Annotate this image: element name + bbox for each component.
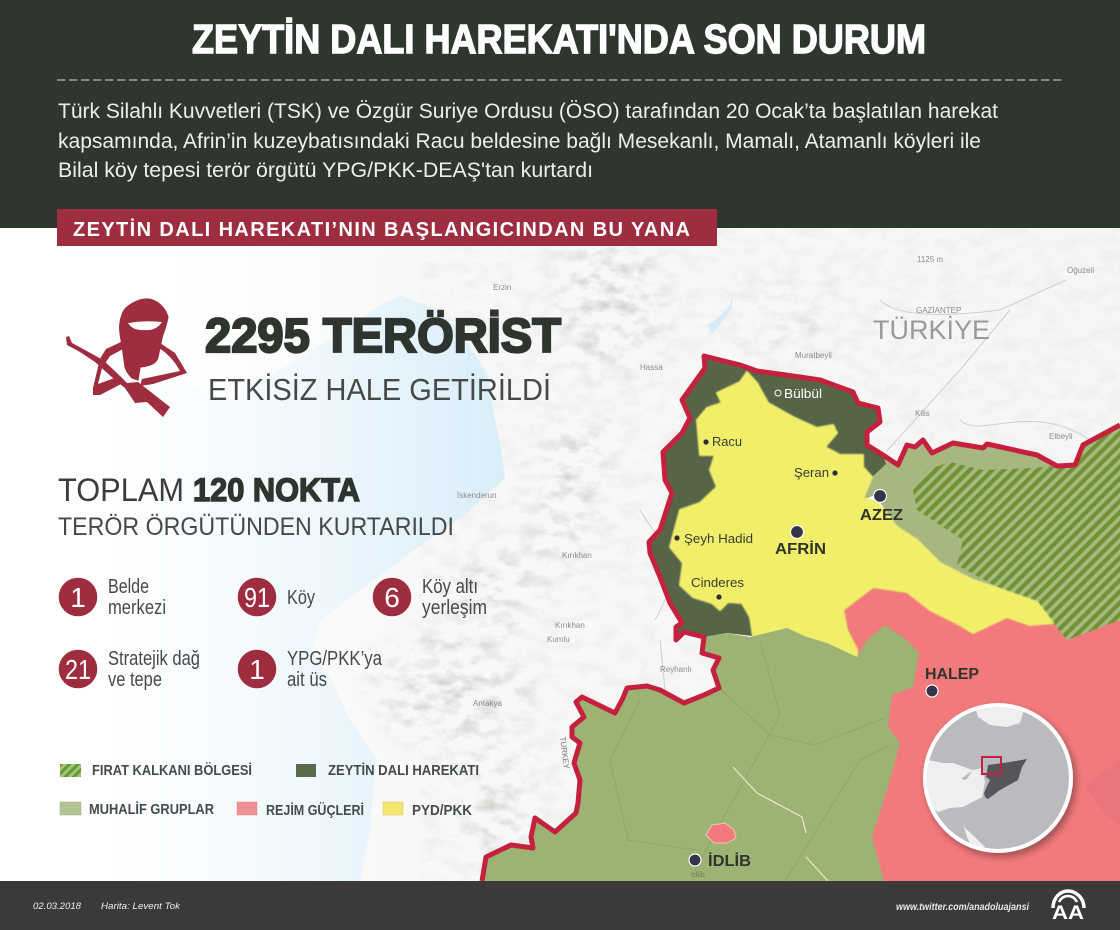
legend: PYD/PKK: PYD/PKK	[412, 803, 472, 819]
map place labels: Elbeyli	[1049, 432, 1073, 441]
intro paragraph: kapsamında, Afrin’in kuzeybatısındaki Racu beldesine bağlı Mesekanlı, Mamalı, Atamanlı köyleri ile	[58, 130, 981, 153]
city: İdlib: Idlib	[691, 870, 705, 879]
stat: 6 hamlets: yerleşim	[422, 597, 487, 619]
stats	[59, 576, 487, 691]
header band	[0, 0, 1120, 228]
mediterranean	[927, 760, 985, 812]
legend: regime	[237, 802, 364, 819]
legend: Olive Branch: ZEYTİN DALI HAREKATI	[328, 762, 479, 779]
city: Afrin	[775, 526, 826, 558]
stat: 6 hamlets	[373, 576, 487, 619]
map place labels: İskenderun	[457, 491, 497, 500]
stat: 6 hamlets: Köy altı	[422, 576, 478, 598]
stat: 1 base: YPG/PKK’ya	[287, 648, 383, 670]
region: darker area	[1085, 760, 1120, 825]
map place labels: Kumlu	[547, 635, 570, 644]
city: Cinderes: Cinderes	[691, 575, 745, 590]
stat: 21 hills	[59, 648, 200, 691]
banner: ZEYTİN DALI HAREKATI’NIN BAŞLANGICINDAN BU YANA	[73, 218, 690, 241]
title: ZEYTİN DALI HAREKATI'NDA SON DURUM	[192, 16, 926, 62]
logo: AA	[1052, 891, 1084, 924]
city: Bülbül: Bülbül	[784, 386, 822, 401]
city: Azez	[860, 490, 903, 524]
logo: AA: AA	[1052, 903, 1084, 924]
city: Şeyh Hadid: Şeyh Hadid	[684, 531, 753, 546]
region: opposition Idlib	[482, 625, 919, 881]
city: Azez: AZEZ	[860, 507, 903, 524]
banner	[57, 209, 717, 246]
legend	[60, 762, 479, 819]
city: Cinderes	[691, 575, 745, 600]
map place labels: Erzin	[493, 283, 511, 292]
city: Afrin: AFRİN	[775, 540, 826, 558]
stat: 1 town centre: merkezi	[108, 597, 166, 619]
stat: 1 town centre: Belde	[108, 576, 149, 598]
stat: 21 hills: ve tepe	[108, 669, 162, 691]
map place labels: Antakya	[473, 699, 502, 708]
stat: 91 villages: 91	[244, 582, 270, 613]
legend: opposition	[60, 801, 214, 818]
intro paragraph: Bilal köy tepesi terör örgütü YPG/PKK-DEAŞ'tan kurtardı	[58, 159, 593, 182]
stat: 21 hills: 21	[65, 654, 91, 685]
roads in Idlib	[610, 640, 890, 881]
stat: 1 base: 1	[249, 654, 265, 685]
stat: 1 base	[238, 648, 383, 691]
map place labels: Oğuzeli	[1067, 266, 1094, 275]
map place labels: 1125 m	[917, 255, 943, 264]
legend: opposition: MUHALİF GRUPLAR	[89, 801, 214, 818]
map place labels: Kilis	[915, 409, 930, 418]
region: opposition north	[863, 425, 1120, 640]
map place labels: Kırıkhan	[562, 551, 592, 560]
sea	[0, 295, 505, 881]
syria	[984, 759, 1027, 799]
stat: 91 villages: Köy	[287, 587, 315, 609]
subheadline: TERÖR ÖRGÜTÜNDEN KURTARILDI	[58, 513, 454, 541]
legend: Euphrates Shield: FIRAT KALKANI BÖLGESİ	[92, 762, 252, 779]
map place labels	[457, 255, 1094, 708]
roads	[640, 280, 1090, 690]
Turkish border	[482, 356, 1120, 881]
locator square	[982, 757, 1001, 774]
region: Euphrates Shield stripes	[913, 425, 1120, 640]
date: 02.03.2018	[33, 901, 82, 912]
country label: Türkiye: TÜRKİYE	[873, 314, 990, 345]
map place labels: Kırıkhan	[555, 621, 585, 630]
map regions	[482, 356, 1120, 881]
icon: masked militant with rifle	[66, 299, 187, 417]
stat: 6 hamlets: 6	[384, 582, 400, 613]
map place labels: Reyhanlı	[660, 665, 692, 674]
city: İdlib	[689, 852, 751, 879]
twitter address: www.twitter.com/anadoluajansi	[896, 901, 1030, 913]
city: Şeran: Şeran	[794, 465, 829, 480]
map place labels: Muratbeyli	[795, 351, 832, 360]
black sea	[976, 707, 1024, 727]
stat: 1 town centre: 1	[70, 582, 86, 613]
city: İdlib: İDLİB	[708, 852, 751, 870]
label: Turkey on border: TURKEY	[558, 736, 571, 770]
stat: 1 town centre	[59, 576, 166, 619]
red sea	[962, 821, 985, 848]
headline: 120 points	[58, 472, 360, 508]
region: regime forces	[843, 587, 1120, 881]
legend: PYD/PKK	[383, 802, 472, 819]
headline: 120 points: 120 NOKTA	[193, 472, 360, 508]
stat: 21 hills: Stratejik dağ	[108, 648, 200, 670]
cyprus	[962, 771, 972, 780]
legend: regime: REJİM GÜÇLERİ	[266, 802, 364, 819]
land	[349, 228, 1120, 881]
intro paragraph	[58, 100, 998, 182]
map base	[211, 228, 1120, 881]
region: Olive Branch	[649, 356, 886, 640]
map place labels: GAZİANTEP	[916, 306, 961, 315]
headline: 2295 terrorists: 2295 TERÖRİST	[205, 310, 561, 363]
region: regime enclave	[706, 823, 736, 843]
headline: 120 points: TOPLAM	[58, 472, 184, 508]
inset locator map	[920, 700, 1073, 853]
stat: 91 villages	[238, 578, 315, 616]
map place labels: Hassa	[640, 363, 663, 372]
subheadline: ETKİSİZ HALE GETİRİLDİ	[208, 372, 551, 407]
map credit: Harita: Levent Tok	[101, 901, 181, 912]
intro paragraph: Türk Silahlı Kuvvetleri (TSK) ve Özgür Suriye Ordusu (ÖSO) tarafından 20 Ocak’ta başlatılan harekat	[58, 100, 998, 123]
white road	[733, 767, 828, 881]
stat: 1 base: ait üs	[287, 669, 327, 691]
footer	[0, 881, 1120, 930]
city: Racu: Racu	[712, 434, 742, 449]
city: Halep: HALEP	[925, 666, 979, 683]
lake	[708, 291, 733, 334]
city: Halep	[925, 666, 979, 697]
region: PYD/PKK	[670, 372, 1053, 657]
